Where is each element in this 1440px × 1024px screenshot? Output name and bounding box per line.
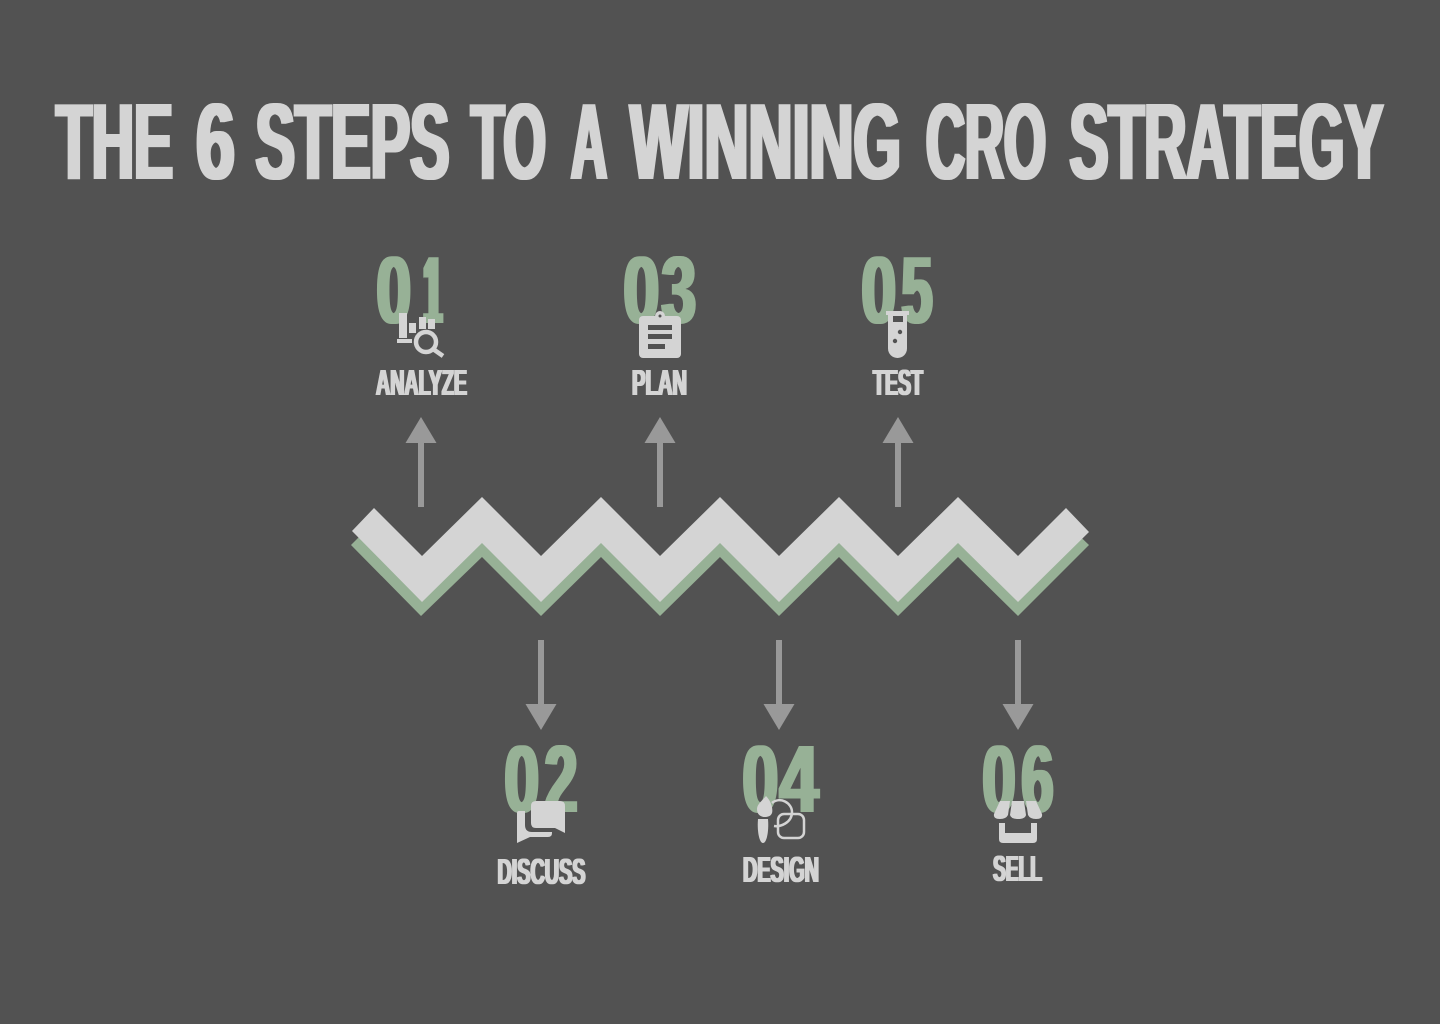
arrow: up to step 03: [644, 417, 676, 507]
label design: DESIGN: [743, 849, 819, 890]
number 03: 0: [624, 237, 659, 344]
title: A: [571, 81, 607, 203]
step 02 discuss: [498, 726, 586, 892]
step 04 design: [742, 726, 819, 890]
arrow: up to step 05: [882, 417, 914, 507]
arrow: down to step 06: [1002, 640, 1034, 730]
label analyze: ANALYZE: [376, 362, 467, 403]
label test: TEST: [873, 362, 923, 403]
icon: brush and shapes: [757, 796, 804, 843]
icon: clipboard: [639, 311, 681, 358]
zigzag band: [351, 497, 1089, 616]
number 02: 0: [504, 726, 539, 833]
title: CRO: [926, 81, 1046, 203]
step 05 test: [862, 237, 932, 403]
title: THE: [56, 81, 173, 203]
number 04: 0: [742, 726, 778, 833]
label sell: SELL: [993, 848, 1042, 889]
icon: test tube: [886, 311, 909, 358]
number 05: 0: [862, 237, 896, 344]
title: [56, 81, 1384, 203]
icon: chart with magnifier: [397, 313, 443, 356]
number 01: 0: [376, 237, 411, 344]
arrow: down to step 04: [764, 640, 794, 730]
step 01 analyze: 1: [424, 237, 441, 344]
label plan: PLAN: [632, 362, 687, 403]
label discuss: DISCUSS: [498, 851, 586, 892]
step 06 sell: [982, 726, 1054, 889]
arrow: down to step 02: [526, 640, 556, 730]
zigzag shadow: [351, 511, 1089, 616]
title: WINNING: [630, 81, 901, 203]
zigzag ribbon: [352, 497, 1089, 602]
step 01 analyze: [376, 237, 467, 403]
number 04: 4: [780, 726, 818, 833]
icon: chat bubbles: [517, 801, 565, 843]
number 05: 5: [902, 237, 932, 344]
number 03: 3: [662, 237, 696, 344]
title: 6: [196, 81, 235, 203]
number 06: 6: [1022, 726, 1054, 833]
arrow: up to step 01: [406, 417, 436, 507]
title: TO: [471, 81, 546, 203]
title: STEPS: [256, 81, 450, 203]
number 06: 0: [982, 726, 1016, 833]
number 02: 2: [544, 726, 578, 833]
step 03 plan: [624, 237, 696, 403]
icon: storefront: [994, 801, 1042, 843]
